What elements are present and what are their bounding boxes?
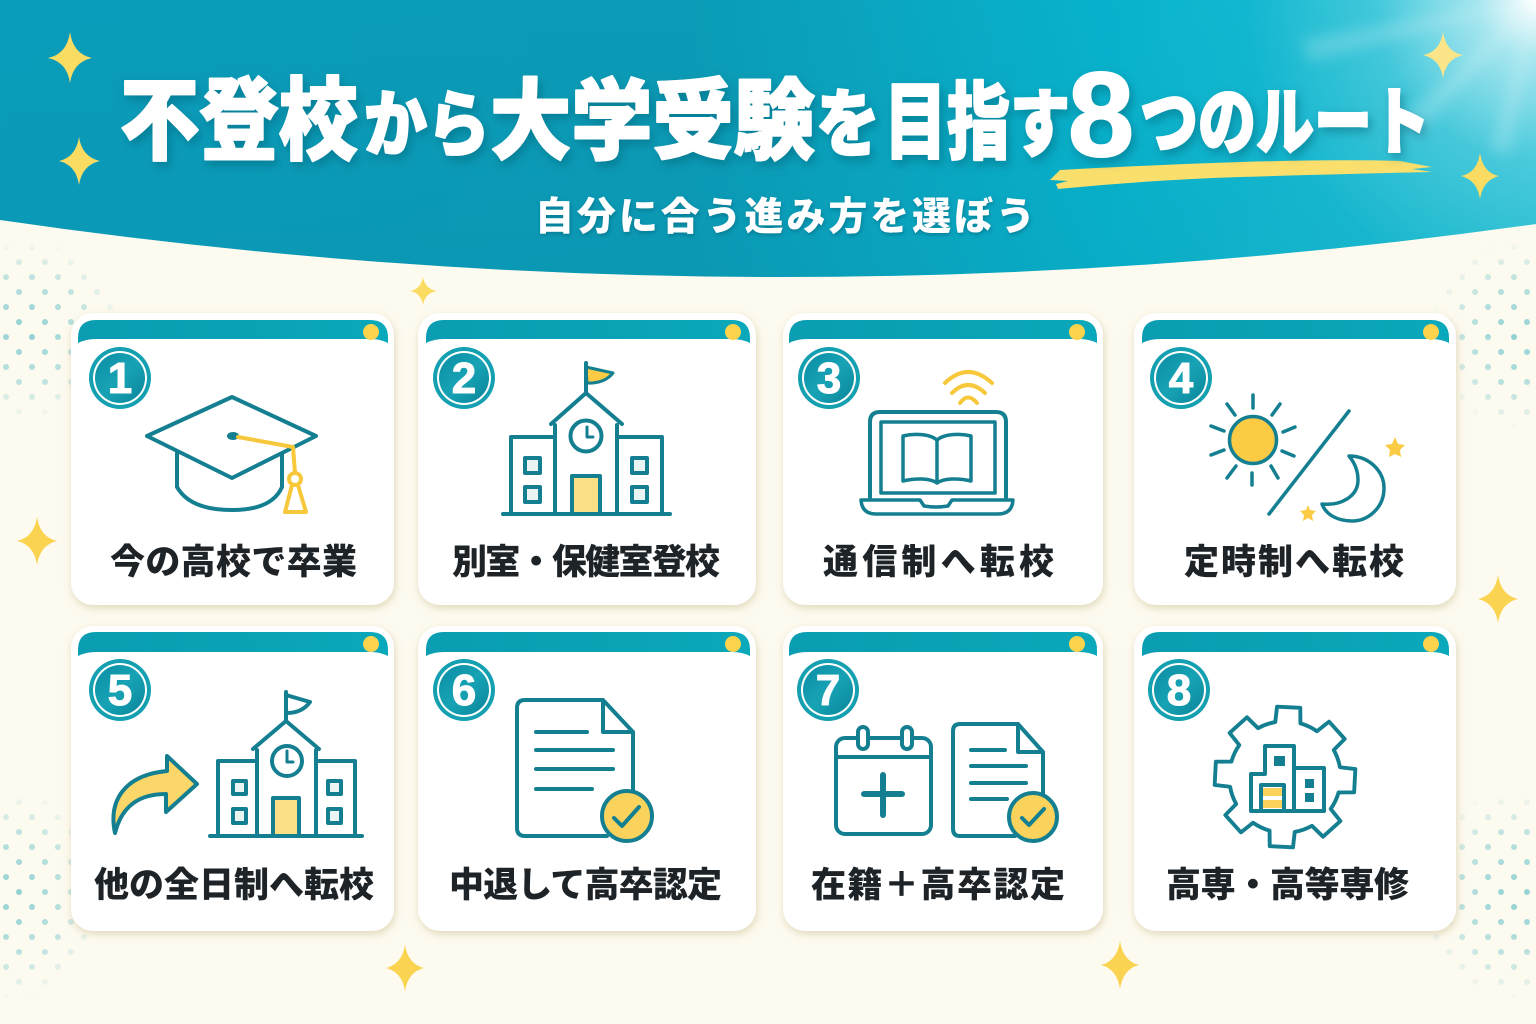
title: 不登校: [120, 48, 358, 178]
icon: sun and moon: [1211, 395, 1405, 521]
label: 定時制へ転校: [1184, 534, 1404, 585]
icon: gear with buildings: [1212, 704, 1358, 850]
panel: route 4: [1134, 313, 1456, 605]
number badge 6: 6: [452, 666, 476, 715]
icon: calendar with plus: [836, 727, 931, 834]
label: 通信制へ転校: [823, 534, 1054, 585]
icon: arrow: [113, 756, 197, 833]
number badge 2: 2: [452, 354, 476, 403]
number badge 8: 8: [1167, 666, 1191, 715]
number badge 5: 5: [108, 666, 132, 715]
title: 目指: [884, 56, 1010, 177]
panel: route 2: [418, 313, 756, 605]
yellow brush underline: [1050, 160, 1432, 189]
label: 中退して高卒認定: [449, 857, 722, 908]
panel: route 6: [418, 626, 756, 931]
icon: document with check: [517, 700, 652, 841]
title: 大学受験: [490, 51, 815, 178]
panel: route 1: [71, 313, 394, 605]
title: から: [364, 66, 490, 171]
panel: route 7: [783, 626, 1103, 931]
subtitle: 自分に合う進み方を選ぼう: [535, 186, 1035, 242]
title: す: [1010, 65, 1070, 172]
title: を: [816, 65, 880, 172]
number badge 3: [798, 347, 860, 409]
icon: school with yellow flag: [503, 363, 670, 514]
title: つのルート: [1140, 63, 1430, 170]
title: 8: [1068, 48, 1134, 182]
panel: route 8: [1134, 626, 1456, 931]
number badge 6: [433, 659, 495, 721]
label: 今の高校で卒業: [110, 534, 357, 585]
panel: route 3: [783, 313, 1103, 605]
header banner: [0, 0, 1536, 300]
number badge 7: 7: [816, 666, 840, 715]
icon: school with white flag: [210, 692, 362, 836]
number badge 1: 1: [108, 354, 132, 403]
label: 在籍＋高卒認定: [811, 857, 1065, 908]
number badge 4: 4: [1169, 354, 1194, 403]
label: 別室・保健室登校: [452, 534, 720, 585]
number badge 1: [89, 347, 151, 409]
number badge 8: [1148, 659, 1210, 721]
number badge 3: 3: [817, 354, 841, 403]
icon: laptop with book and wifi: [861, 372, 1013, 514]
label: 他の全日制へ転校: [94, 857, 374, 908]
title: [120, 48, 1430, 182]
label: 高専・高等専修: [1166, 857, 1409, 908]
number badge 5: [89, 659, 151, 721]
halftone dots: [3, 245, 1530, 985]
panel: route 5: [71, 626, 394, 931]
number badge 2: [433, 347, 495, 409]
icon: graduation cap: [147, 397, 316, 512]
number badge 7: [797, 659, 859, 721]
number badge 4: [1150, 347, 1212, 409]
icon: document with check: [953, 724, 1057, 841]
